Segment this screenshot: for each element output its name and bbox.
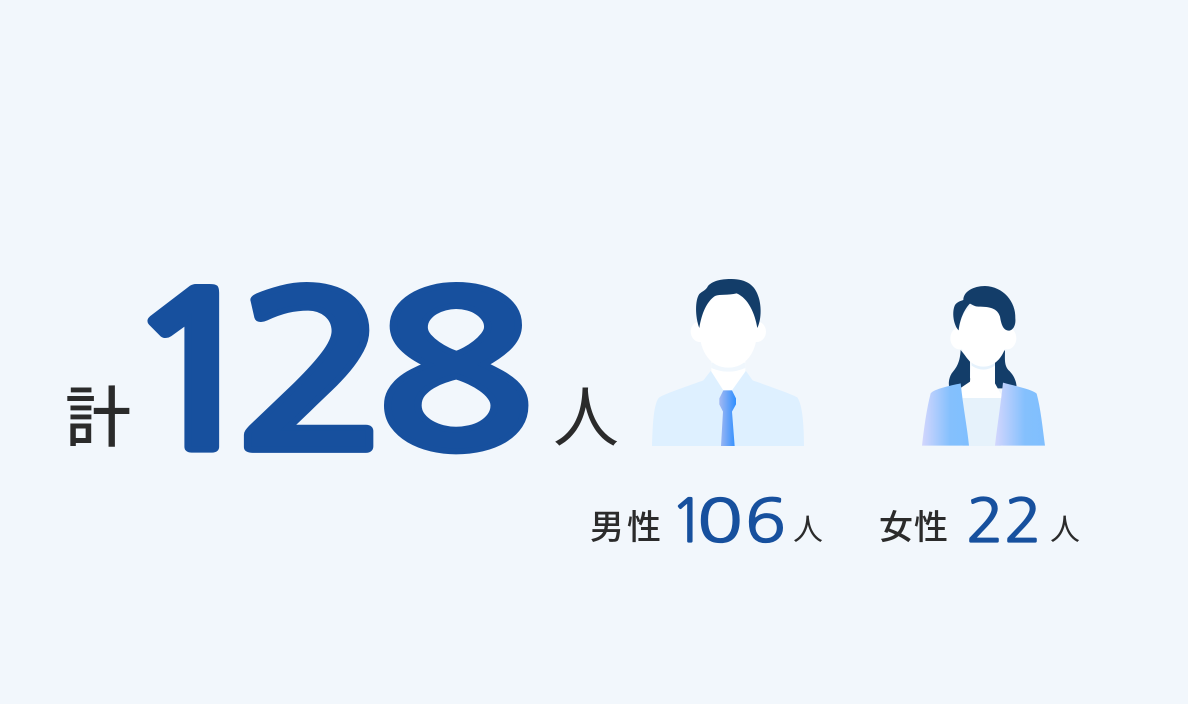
total unit: 人: 人	[553, 381, 619, 455]
female number: 22	[966, 492, 1042, 551]
icon: man in suit	[652, 279, 804, 446]
male label: 男性: 男性	[590, 509, 664, 547]
male unit: 人: 人	[793, 514, 823, 547]
female unit: 人: 人	[1050, 514, 1080, 547]
male number: 106: 0	[697, 492, 743, 551]
male number: 106	[670, 492, 786, 551]
male number: 106: 1	[670, 492, 706, 551]
total label: 計: 計	[65, 381, 131, 455]
icon: woman in jacket	[922, 286, 1045, 446]
female number: 22: 2	[966, 492, 1004, 551]
female number: 22: 2	[1004, 492, 1042, 551]
total number: 128: 2	[232, 269, 394, 481]
male number: 106: 6	[745, 492, 786, 551]
total number: 128: 1	[118, 269, 274, 481]
total number: 128	[118, 269, 536, 481]
female label: 女性: 女性	[879, 509, 949, 547]
total number: 128: 8	[374, 269, 536, 481]
